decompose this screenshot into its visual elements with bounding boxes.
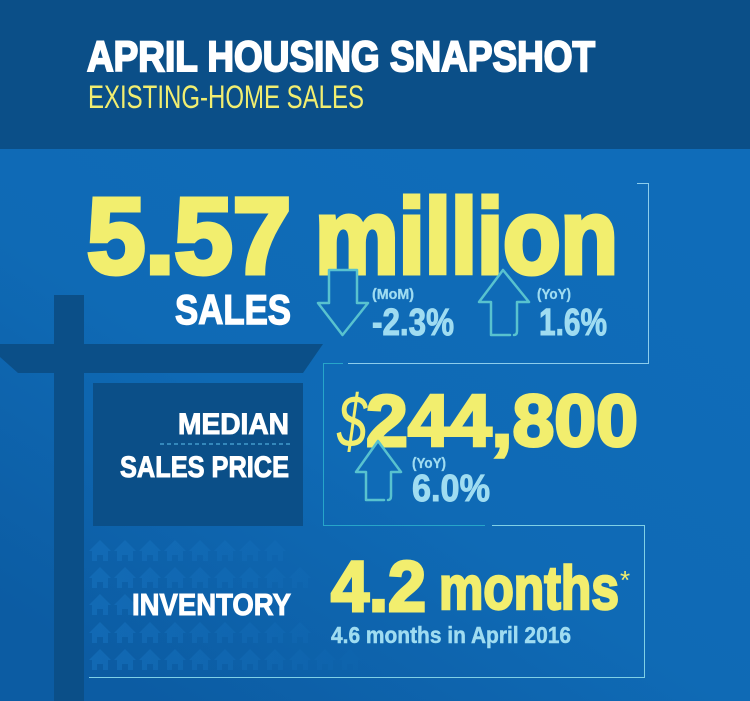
sales price: SALES PRICE — [120, 451, 289, 484]
icon: down arrow — [318, 270, 368, 335]
header band — [0, 0, 750, 149]
sign post — [0, 295, 323, 701]
panel: price — [336, 380, 638, 510]
panel: sales — [87, 175, 618, 344]
year over year label: (YoY) — [412, 455, 446, 472]
median: MEDIAN — [178, 408, 289, 441]
panel: inventory — [132, 548, 630, 648]
icon: up arrow — [479, 270, 529, 335]
year over year value: 1.6% — [539, 302, 607, 344]
panel: median sales price label — [93, 383, 303, 526]
sales figure: 5.57 — [87, 175, 291, 296]
inventory label: INVENTORY — [132, 587, 291, 622]
dashed divider — [160, 443, 292, 445]
sales label: SALES — [175, 286, 291, 333]
asterisk: * — [620, 565, 630, 595]
subtitle: EXISTING-HOME SALES — [88, 79, 364, 115]
months: months — [439, 554, 619, 622]
dollar sign: $ — [336, 380, 368, 463]
month over month value: -2.3% — [372, 302, 454, 344]
title: APRIL HOUSING SNAPSHOT — [87, 33, 595, 81]
year over year value: 6.0% — [412, 468, 490, 510]
price value: 244,800 — [366, 381, 638, 462]
house pattern — [89, 540, 361, 670]
million: million — [315, 178, 618, 296]
inventory value: 4.2 — [331, 548, 426, 627]
frame lines — [89, 184, 648, 678]
comparison note: 4.6 months in April 2016 — [331, 622, 571, 648]
icon: up arrow — [356, 441, 401, 500]
month over month label: (MoM) — [372, 286, 414, 303]
year over year label: (YoY) — [537, 286, 571, 303]
